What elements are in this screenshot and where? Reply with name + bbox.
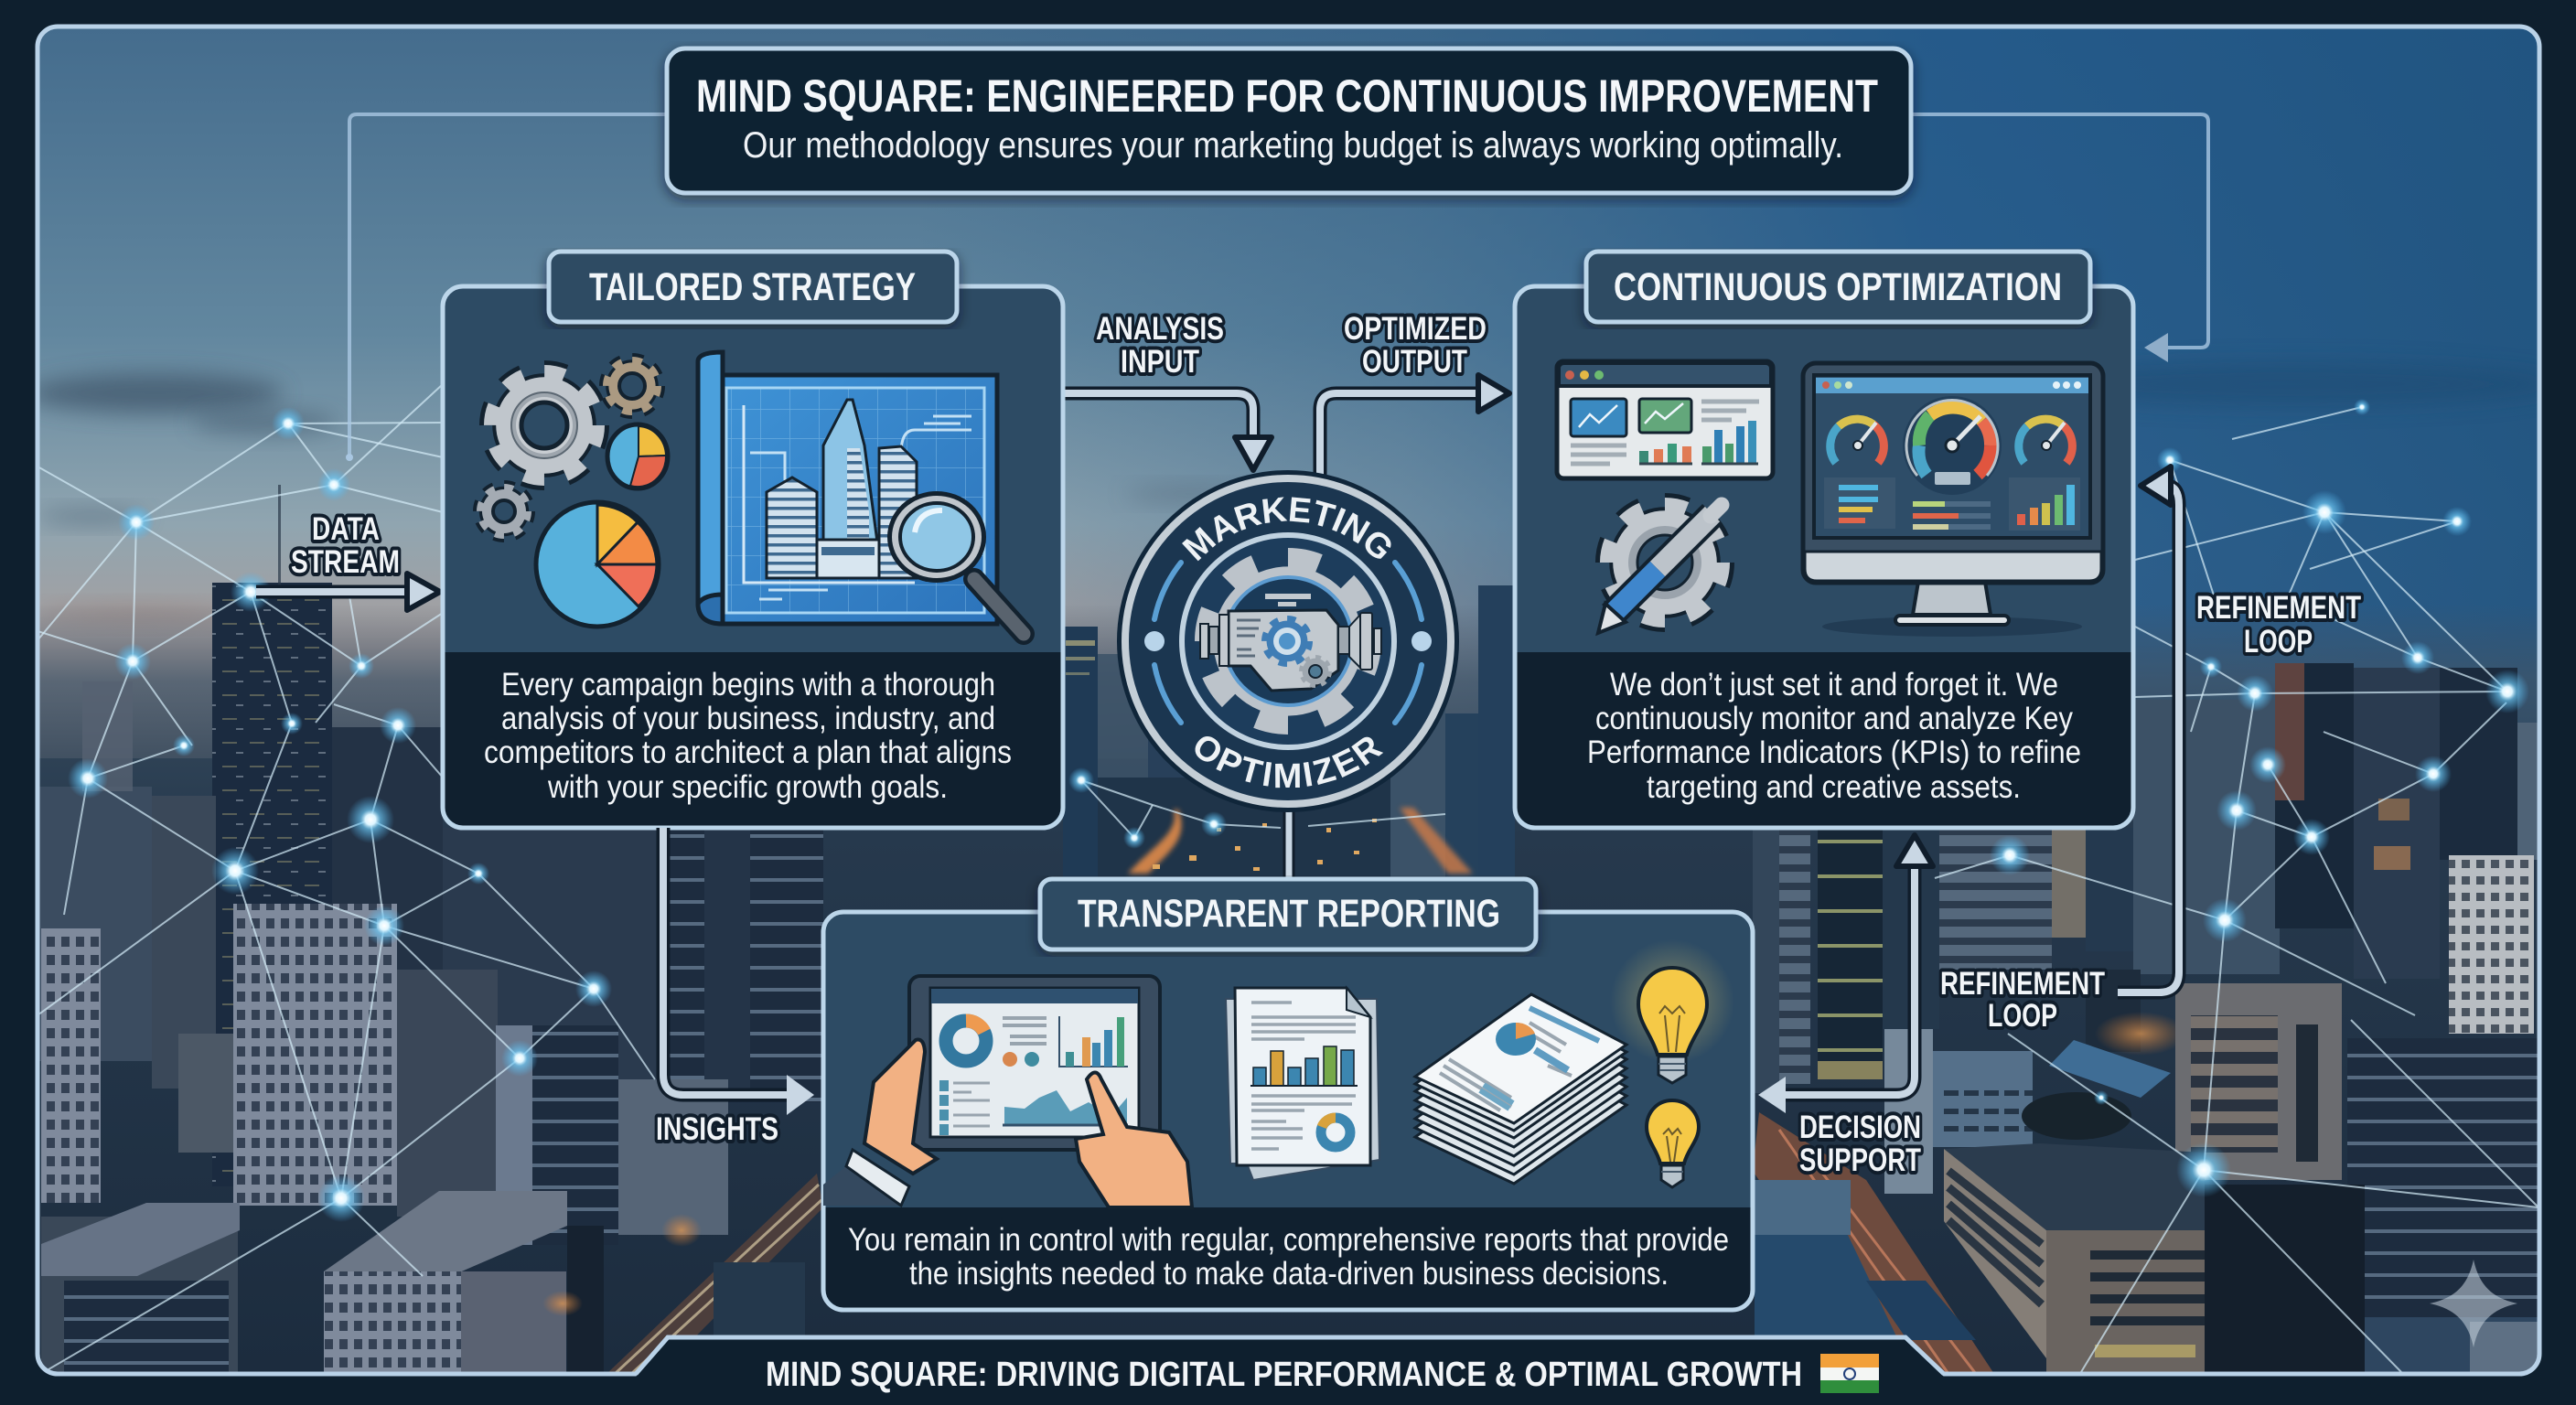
- icon: small gray gear: [477, 484, 531, 539]
- label: analysis input: ANALYSIS: [1096, 311, 1224, 347]
- label: refinement loop lower: [1940, 966, 2105, 1034]
- far towers: [38, 787, 152, 1061]
- mid towers: [662, 828, 823, 1102]
- icon: browser analytics window: [1557, 361, 1773, 478]
- connector: badge to reporting: [1283, 805, 1295, 880]
- icon: monitor with gauges dashboard: [1803, 363, 2103, 637]
- label: decision support: SUPPORT: [1799, 1142, 1921, 1178]
- large gauge: [1903, 396, 2002, 495]
- body text: [1587, 667, 2081, 805]
- icon: large gear: [488, 369, 601, 482]
- label: refinement loop upper: LOOP: [2244, 624, 2313, 660]
- label: refinement loop upper: REFINEMENT: [2196, 590, 2361, 626]
- label: decision support: [1799, 1110, 1921, 1178]
- heading tab: [549, 252, 957, 322]
- lower center-right buildings: [1944, 1143, 2205, 1230]
- blue arcs: [1154, 563, 1422, 723]
- body text: competitors to architect a plan that aligns: [484, 735, 1012, 770]
- label: data stream: STREAM: [291, 544, 400, 580]
- label: refinement loop lower: LOOP: [1988, 998, 2057, 1034]
- near low-rise left: [41, 1217, 238, 1374]
- small gauges: [1830, 419, 2072, 463]
- body text: Performance Indicators (KPIs) to refine: [1587, 735, 2081, 770]
- icon: brown gear: [604, 358, 660, 414]
- icon: small pie chart: [607, 424, 668, 488]
- feedback connector: title to continuous optimization: [1913, 114, 2208, 362]
- arrow: decision support: [1758, 835, 1933, 1113]
- title text: MIND SQUARE: ENGINEERED FOR CONTINUOUS IMPROVEMENT: [696, 70, 1878, 122]
- heading tab: TAILORED STRATEGY: [589, 265, 916, 309]
- subtitle text: Our methodology ensures your marketing budget is always working optimally.: [743, 125, 1843, 166]
- label: optimized output: OPTIMIZED: [1344, 311, 1487, 347]
- lower right blocks: [1884, 1029, 1933, 1194]
- heading tab: CONTINUOUS OPTIMIZATION: [1614, 265, 2062, 309]
- panel: transparent reporting: [823, 879, 1753, 1310]
- body text: continuously monitor and analyze Key: [1595, 701, 2073, 736]
- heading tab: [1586, 252, 2090, 322]
- body text: [848, 1222, 1729, 1292]
- right upper towers: [2133, 737, 2280, 974]
- body text: targeting and creative assets.: [1647, 769, 2021, 805]
- label: refinement loop lower: REFINEMENT: [1940, 966, 2105, 1002]
- icon: large pie chart: [536, 502, 659, 627]
- label: decision support: DECISION: [1799, 1110, 1921, 1145]
- icon: blueprint with city towers: [698, 352, 1024, 634]
- icon: light bulbs: [1610, 939, 1734, 1187]
- marketing optimizer badge: [1117, 470, 1459, 812]
- footer text: MIND SQUARE: DRIVING DIGITAL PERFORMANCE & OPTIMAL GROWTH: [766, 1356, 1802, 1394]
- label: analysis input: INPUT: [1121, 344, 1199, 380]
- badge text: marketing: MARKETING: [1182, 497, 1390, 562]
- icon: stack of reports: [1415, 994, 1626, 1184]
- label: optimized output: [1344, 311, 1487, 380]
- body text: [484, 667, 1012, 805]
- middle skyline behind badge: [1063, 627, 1098, 878]
- icon: india flag: [1820, 1354, 1879, 1393]
- ring dots: [1144, 631, 1432, 651]
- body text: with your specific growth goals.: [547, 769, 948, 805]
- icon: tablet with dashboard and hands: [823, 976, 1192, 1207]
- dashboard widgets: [1824, 477, 2080, 531]
- road left: [606, 1174, 823, 1374]
- body text: You remain in control with regular, comprehensive reports that provide: [848, 1222, 1729, 1258]
- heading tab: TRANSPARENT REPORTING: [1078, 892, 1500, 936]
- network lines and nodes: [38, 384, 2538, 1372]
- label: analysis input: [1096, 311, 1224, 380]
- body text: Every campaign begins with a thorough: [501, 667, 995, 702]
- arrow: data stream: [256, 574, 440, 610]
- title box: [667, 48, 1911, 193]
- arrow: analysis input: [1063, 393, 1272, 470]
- arrow: optimized output: [1320, 375, 1509, 476]
- label: insights: INSIGHTS: [656, 1111, 778, 1147]
- label: optimized output: OUTPUT: [1362, 344, 1467, 380]
- arrow: insights: [663, 828, 814, 1115]
- body text: We don’t just set it and forget it. We: [1610, 667, 2058, 702]
- heading tab: [1040, 879, 1536, 949]
- badge text: optimizer: OPTIMIZER: [1195, 736, 1383, 788]
- body text: the insights needed to make data-driven business decisions.: [909, 1256, 1669, 1292]
- central gear and engine: [1200, 560, 1381, 723]
- arrow: refinement loop: [2118, 467, 2179, 992]
- label: data stream: [291, 511, 400, 580]
- label: data stream: DATA: [312, 511, 380, 547]
- watermark sparkle: [2430, 1260, 2517, 1347]
- panel: continuous optimization: [1515, 252, 2133, 828]
- panel: tailored strategy: [443, 252, 1063, 828]
- label: refinement loop upper: [2196, 590, 2361, 660]
- icon: gear with pen: [1598, 502, 1725, 633]
- icon: report document: [1226, 988, 1379, 1180]
- body text: analysis of your business, industry, and: [501, 701, 995, 736]
- feedback connector: title to left network: [346, 114, 665, 461]
